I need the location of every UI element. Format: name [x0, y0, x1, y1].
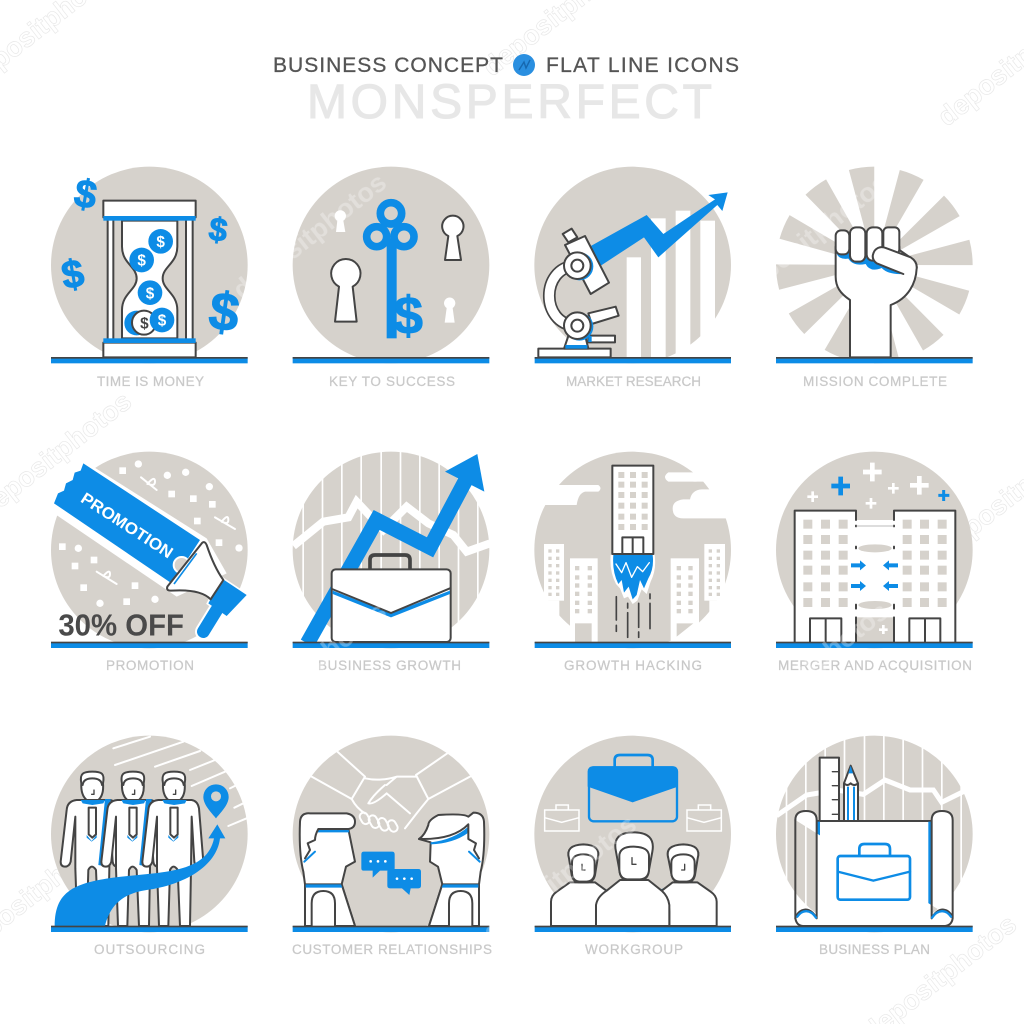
- icon: building rocket over city: [530, 452, 733, 648]
- icon: hourglass with coins: $: [146, 285, 155, 302]
- panel: workgroup: [534, 736, 731, 957]
- icon: hourglass with coins: $: [158, 313, 167, 330]
- icon: hourglass with coins: $: [58, 251, 87, 298]
- watermark: over icons: depositphotos: [227, 596, 392, 734]
- watermark: over icons: depositphotos: [477, 384, 642, 522]
- icon: blueprint with ruler and pencil: [776, 735, 973, 932]
- watermark: over icons: depositphotos: [729, 167, 894, 305]
- label: time is money: TIME IS MONEY: [97, 374, 205, 389]
- label: workgroup: WORKGROUP: [585, 942, 684, 957]
- icon: team with path arrow and pin: [51, 736, 248, 932]
- watermark: over icons: depositphotos: [227, 167, 392, 305]
- label: mission complete: MISSION COMPLETE: [803, 374, 948, 389]
- icon: hourglass with coins: $: [71, 171, 100, 218]
- watermark: over icons: depositphotos: [477, 809, 642, 947]
- brand name: MONSPERFECT: [307, 76, 712, 129]
- label: key to success: KEY TO SUCCESS: [329, 374, 456, 389]
- watermark: over icons: [227, 167, 894, 947]
- label: business growth: BUSINESS GROWTH: [318, 658, 462, 673]
- panel: mission complete: [776, 205, 973, 389]
- icon: megaphone with ribbon: PROMOTION: [77, 489, 176, 562]
- icon: briefcase with growth arrow: [293, 450, 490, 648]
- icon: three people and briefcases: [534, 736, 731, 932]
- icon: megaphone with ribbon: [47, 452, 248, 648]
- icon: two merging buildings: [776, 452, 973, 648]
- icon: title badge: [513, 54, 535, 76]
- icon: megaphone with ribbon: 30% OFF: [58, 609, 184, 643]
- panel: key to success: [293, 167, 489, 389]
- panel: business growth: [293, 450, 490, 673]
- label: business plan: BUSINESS PLAN: [819, 942, 931, 957]
- panel: business plan: [776, 735, 973, 957]
- label: customer relationships: CUSTOMER RELATIONSHIPS: [292, 942, 493, 957]
- panel: promotion: [47, 452, 248, 673]
- panel: time is money: [51, 167, 248, 389]
- label: promotion: PROMOTION: [106, 658, 195, 673]
- icon: hourglass with coins: $: [156, 234, 165, 251]
- label: merger and acquisition: MERGER AND ACQUISITION: [778, 658, 973, 673]
- icon: key and keyholes: $: [394, 286, 423, 345]
- label: growth hacking: GROWTH HACKING: [564, 658, 703, 673]
- panel: growth hacking: [530, 452, 733, 673]
- watermark: over icons: depositphotos: [729, 596, 894, 734]
- icon: microscope and rising chart: [534, 167, 731, 363]
- title: flat line icons: FLAT LINE ICONS: [546, 54, 739, 77]
- icon: hourglass with coins: $: [207, 210, 230, 249]
- label: market research: MARKET RESEARCH: [566, 374, 702, 389]
- panel: market research: [534, 167, 731, 389]
- icon: hourglass with coins: $: [140, 315, 149, 332]
- icon: key and keyholes: [293, 167, 489, 363]
- icon: hourglass with coins: $: [137, 253, 146, 270]
- panel: merger and acquisition: [776, 452, 973, 673]
- icon: handshake, two people and speech bubbles: [293, 736, 489, 932]
- title: business concept: BUSINESS CONCEPT: [273, 54, 503, 77]
- panel: outsourcing: [51, 736, 248, 957]
- icon: hourglass with coins: $: [205, 281, 243, 344]
- icon: hourglass with coins: [51, 167, 248, 363]
- panel: customer relationships: [292, 736, 493, 957]
- icon: raised fist with rays: [776, 205, 973, 363]
- label: outsourcing: OUTSOURCING: [94, 942, 206, 957]
